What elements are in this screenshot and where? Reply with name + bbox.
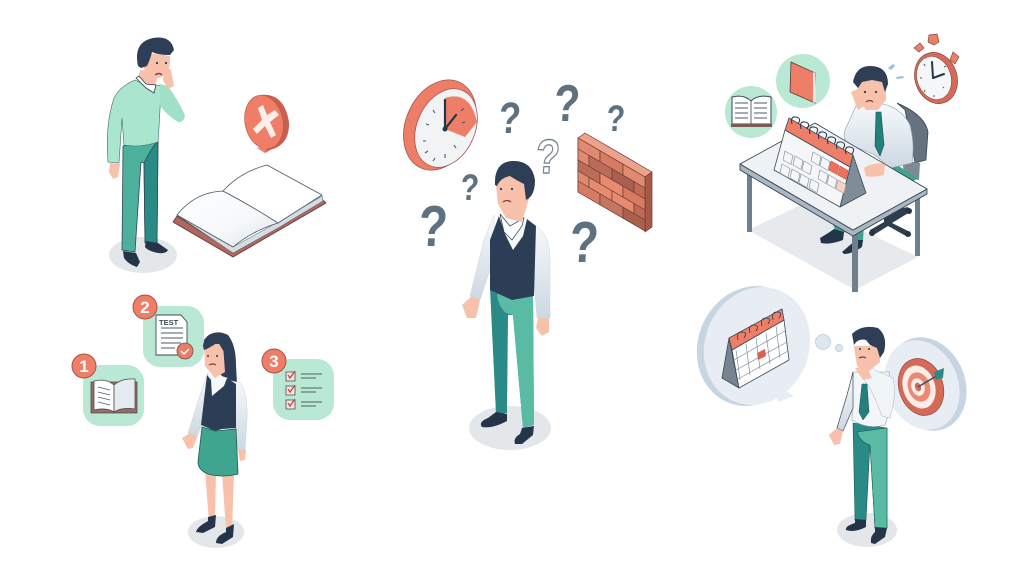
woman shoes: [196, 515, 234, 544]
woman legs: [205, 470, 234, 530]
question marks: ?: [417, 195, 449, 259]
wall clock: [390, 68, 490, 182]
floor shadow: [748, 203, 918, 290]
step tile 2: [143, 306, 204, 367]
spiral rings: [792, 117, 854, 154]
man trousers: [853, 423, 887, 528]
book lying open: [173, 165, 326, 257]
step badge 1: 1: [79, 357, 89, 376]
test sheet icon: TEST: [159, 318, 179, 327]
woman shirt: [208, 372, 228, 398]
man shoes: [123, 241, 168, 267]
man head and hand: [852, 327, 885, 380]
step badge 1: [72, 354, 96, 378]
question marks: ?: [552, 75, 582, 133]
man hands: [462, 296, 549, 336]
question marks: ?: [459, 167, 480, 209]
woman vest: [201, 375, 236, 431]
floor shadow: [837, 513, 897, 547]
man raised arm: [160, 84, 185, 122]
checklist icon: [286, 371, 322, 409]
woman hands: [182, 433, 246, 461]
man tie: [875, 112, 884, 156]
question marks: ?: [605, 98, 626, 140]
brick wall: [578, 133, 652, 232]
man head and hand: [851, 66, 888, 110]
man collar: [500, 214, 524, 240]
desk calendar: [774, 117, 866, 207]
man head: [495, 161, 535, 222]
sweat drops: [888, 64, 904, 79]
outlined question mark: ?: [534, 130, 561, 184]
man vest: [490, 216, 536, 300]
thought bubble: target: [871, 325, 980, 443]
man left hand: [829, 428, 843, 445]
man shirt and arms: [837, 362, 894, 431]
woman sleeves: [188, 372, 247, 450]
step tile 1: [83, 365, 144, 426]
book icon: [91, 379, 137, 413]
step badge 2: [133, 295, 157, 319]
question marks: ?: [497, 94, 522, 143]
man shoes: [846, 519, 887, 544]
step tile 3: [273, 359, 334, 420]
man head: [137, 38, 174, 78]
man shirt: [497, 216, 528, 252]
round icon: closed red book: [776, 54, 830, 108]
icon: red cross bubble: [240, 92, 289, 153]
man torso: [844, 103, 913, 168]
step badge 3: 3: [269, 352, 279, 371]
step badge 3: [262, 349, 286, 373]
date cells: [780, 151, 837, 192]
man hands and neck: [109, 66, 174, 179]
man trousers: [490, 288, 534, 428]
man shoes: [481, 412, 534, 444]
figure: woman with numbered steps: [72, 295, 334, 548]
floor shadow: [188, 516, 244, 548]
question marks: [417, 75, 626, 275]
woman hair back: [204, 332, 237, 384]
floor shadow: [469, 406, 551, 450]
figure: confused man in centre: [390, 68, 652, 450]
thought dots: [816, 334, 842, 352]
figure: stressed man at desk: [725, 34, 964, 292]
question marks: ?: [568, 211, 600, 275]
round icon: open book: [725, 86, 777, 138]
floor shadow: [109, 237, 177, 273]
highlighted date cells: [829, 161, 848, 180]
man forearm on desk: [864, 164, 885, 177]
step badge 2: 2: [140, 298, 150, 317]
calendar icon: [722, 309, 789, 388]
man sweater: [107, 80, 161, 163]
woman skirt: [198, 427, 238, 476]
man collar: [136, 76, 156, 93]
figure: man with failed book: [107, 38, 326, 273]
thought bubble: calendar: [679, 270, 828, 422]
man legs and shoes: [820, 165, 918, 254]
desk top: [740, 123, 927, 236]
stopwatch: [908, 34, 964, 109]
man sleeves: [470, 215, 550, 318]
figure: worried man with goal thoughts: [679, 270, 980, 547]
woman head: [203, 333, 231, 378]
man tie: [859, 384, 869, 420]
desk legs: [747, 172, 920, 292]
man trousers: [122, 141, 158, 252]
chair: [869, 103, 928, 237]
target icon: [891, 353, 951, 421]
